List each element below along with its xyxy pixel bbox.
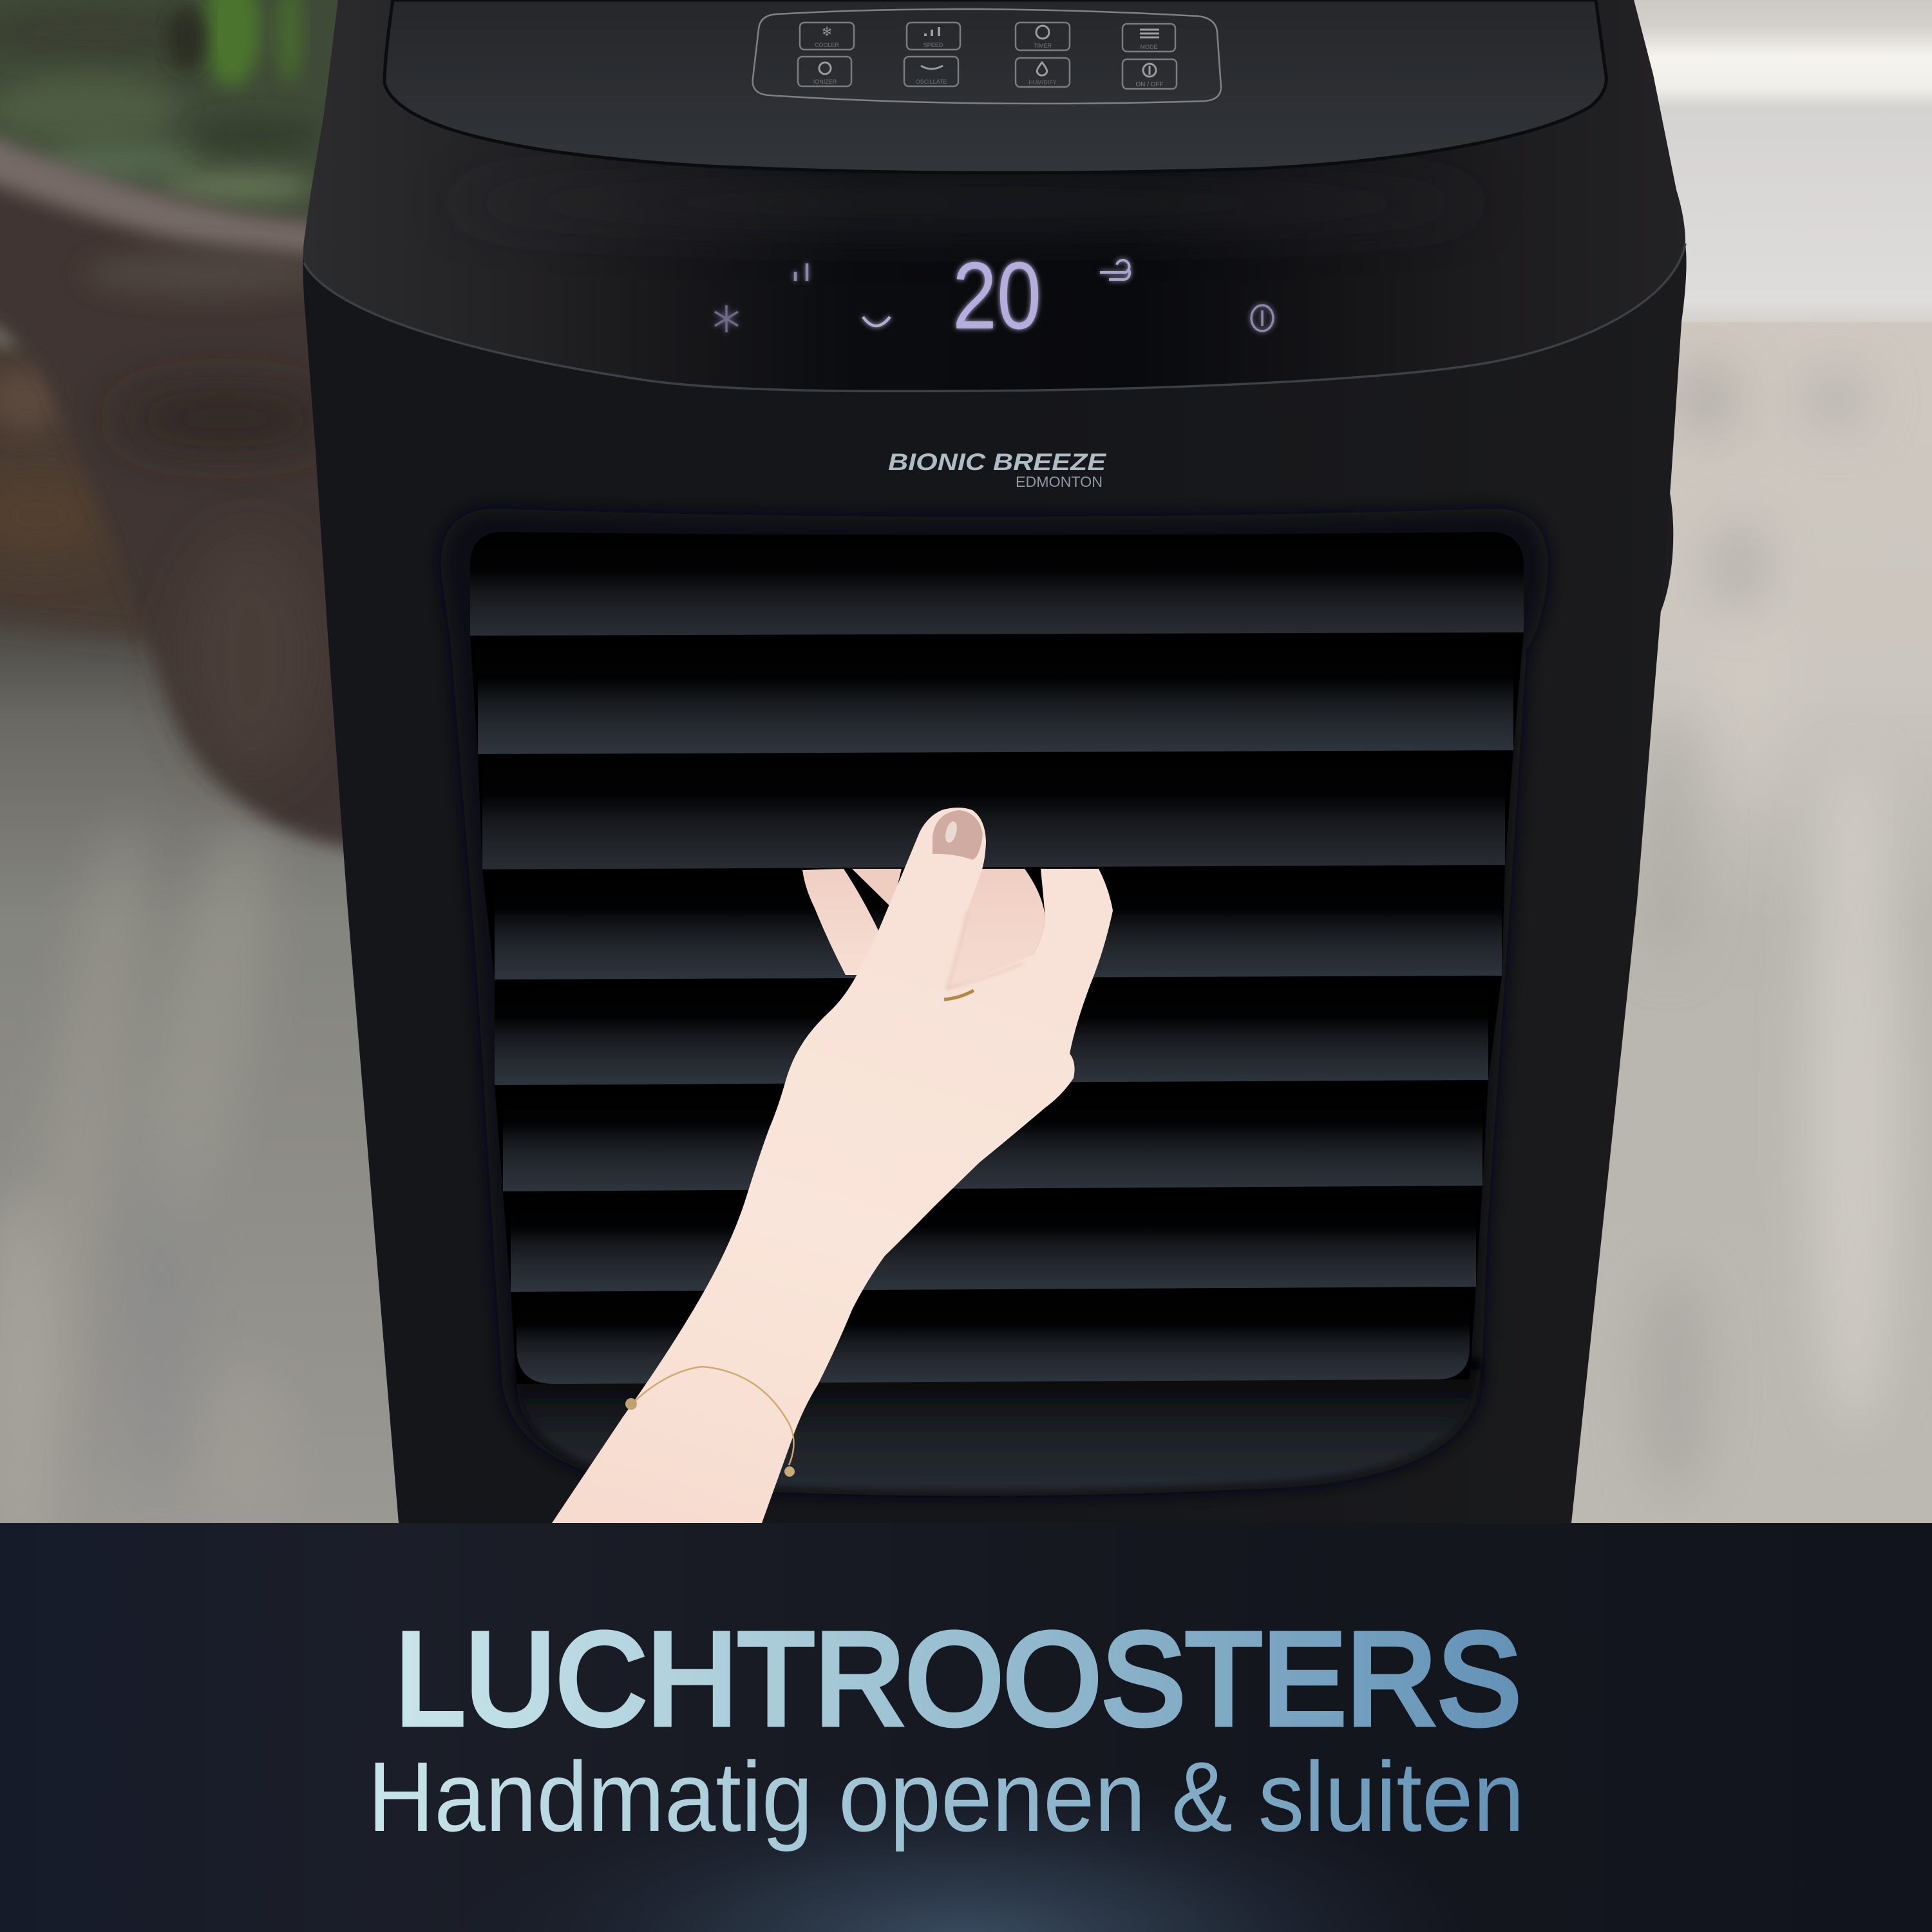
button: cooler [800, 23, 854, 50]
gold bracelet [625, 1367, 795, 1477]
louvre 6 [503, 1080, 1482, 1191]
button: on/off: ON / OFF [1135, 81, 1164, 88]
display readout [715, 243, 1273, 349]
background: planter pot [0, 129, 374, 850]
top control panel [384, 0, 1606, 173]
button: humidify: HUMIDIFY [1028, 79, 1057, 86]
touch control outline [753, 9, 1221, 104]
button: timer: TIMER [1034, 43, 1052, 49]
ring finger [921, 869, 1045, 1018]
title: LUCHTROOSTERS [395, 1606, 1521, 1752]
palm and arm [552, 808, 1113, 1523]
button: oscillate [904, 57, 958, 86]
background: right floor [1546, 322, 1932, 1523]
air louvres [470, 532, 1524, 1384]
brand logo: EDMONTON [1016, 473, 1103, 490]
louvre 4 [495, 865, 1502, 980]
button: ionizer [798, 57, 851, 86]
icon: swing [863, 317, 890, 326]
icon: fan speed [795, 263, 807, 281]
background: left floor [0, 0, 451, 1578]
button: cooler: ❄ [822, 25, 832, 39]
button: speed [907, 23, 960, 50]
button: on/off [1122, 59, 1177, 89]
body silhouette [303, 0, 1687, 1523]
brand logo [888, 449, 1107, 490]
background: plant foliage [0, 0, 361, 245]
grille recess [440, 509, 1548, 1495]
button: mode: MODE [1140, 44, 1158, 50]
collar top highlight [451, 178, 1481, 227]
button: timer [1016, 23, 1070, 50]
side knob [1649, 473, 1673, 617]
icon: mode wind [1100, 260, 1130, 279]
icon: power [1251, 305, 1273, 331]
icon: snowflake [715, 305, 738, 332]
index finger behind the louvre [802, 869, 878, 975]
air cooler body [303, 0, 1687, 1523]
collar seam line [304, 243, 1685, 391]
button: mode [1122, 24, 1175, 52]
louvre 8 [516, 1287, 1470, 1384]
louvre 5 [495, 976, 1488, 1085]
louvre 3 [482, 750, 1505, 869]
middle finger [852, 869, 902, 908]
ring [944, 990, 974, 999]
title band [0, 1523, 1932, 1932]
button: cooler: COOLER [815, 42, 840, 48]
button: humidify [1016, 58, 1070, 87]
subtitle: Handmatig openen & sluiten [368, 1741, 1524, 1852]
thumb nail [933, 810, 983, 860]
button: speed: SPEED [923, 42, 943, 48]
background: wooden floor blur far left [0, 277, 193, 644]
louvre 7 [511, 1186, 1476, 1292]
hand and arm [552, 808, 1113, 1523]
brand logo: BIONIC BREEZE [888, 449, 1107, 475]
button: ionizer: IONIZER [813, 79, 837, 85]
button: oscillate: OSCILLATE [916, 79, 947, 85]
finger curl shadow [947, 911, 1024, 989]
temperature digits: 20 [952, 243, 1041, 349]
background: right wall [1546, 0, 1932, 335]
louvre 1 [470, 532, 1524, 636]
upper collar [303, 0, 1685, 391]
louvre 2 [478, 632, 1513, 754]
